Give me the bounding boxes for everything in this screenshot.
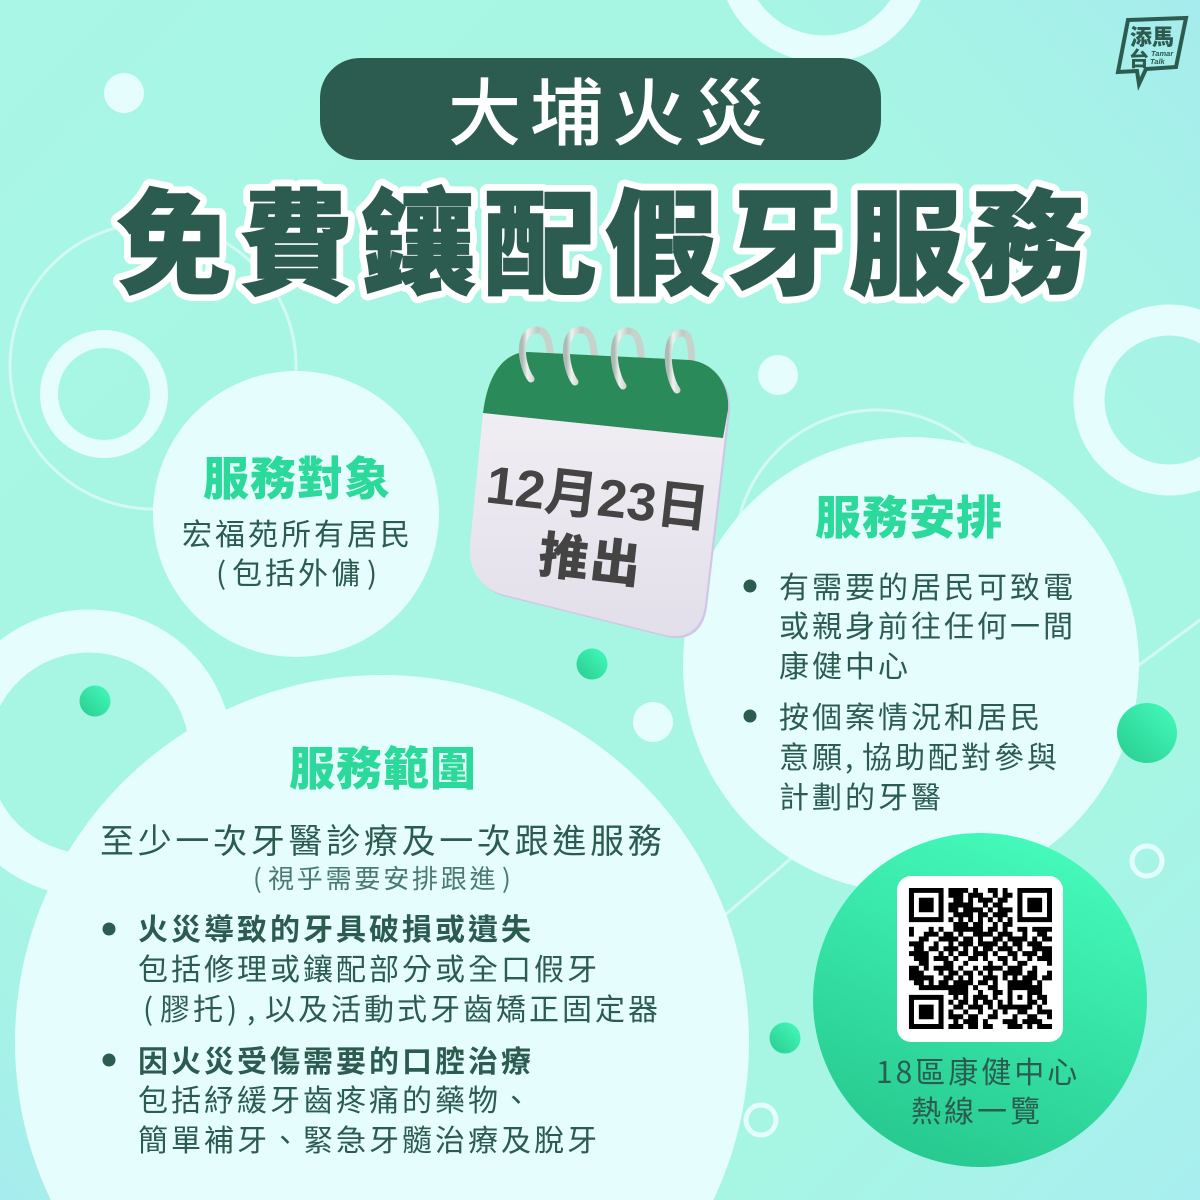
icon: calendar bbox=[470, 330, 730, 638]
text: service target description: 宏福苑所有居民 bbox=[182, 510, 413, 554]
bullet: damaged dentures bbox=[102, 905, 661, 1029]
text: scope summary: ) bbox=[502, 859, 514, 896]
main heading: 免費鑲配假牙服務 bbox=[117, 153, 1093, 318]
logo: Tamar Talk: Tamar bbox=[1151, 49, 1174, 58]
text: scope summary: 至少一次牙醫診療及一次跟進服務 bbox=[100, 814, 666, 863]
bullet: damaged dentures: 膠托 bbox=[160, 985, 226, 1029]
text: service target description bbox=[182, 510, 413, 593]
bullet list: service arrangement: 或親身前往任何一間 bbox=[779, 602, 1076, 646]
bullet: oral treatment bbox=[102, 1037, 600, 1160]
bullet: damaged dentures: 以及活動式牙齒矯正固定器 bbox=[265, 985, 661, 1029]
calendar date text bbox=[476, 456, 712, 605]
text: scope summary: 視乎需要安排跟進 bbox=[268, 859, 498, 896]
bullet: damaged dentures: ( bbox=[143, 985, 156, 1029]
logo: Tamar Talk: 添馬 bbox=[1130, 20, 1174, 52]
panel: service target bbox=[153, 371, 439, 657]
bullet: damaged dentures: 包括修理或鑲配部分或全口假牙 bbox=[138, 945, 600, 989]
bullet: oral treatment: 簡單補牙、緊急牙髓治療及脫牙 bbox=[138, 1116, 600, 1160]
text: scope summary: ( bbox=[253, 859, 265, 896]
main heading: 免費鑲配假牙服務 bbox=[117, 153, 1093, 318]
calendar date text: 12月23日 bbox=[483, 456, 712, 540]
bullet list: service arrangement: , bbox=[845, 733, 856, 777]
bullet list: service arrangement: 計劃的牙醫 bbox=[779, 773, 944, 817]
text: hotline caption bbox=[876, 1048, 1080, 1131]
bullet list: service arrangement: 協助配對參與 bbox=[862, 733, 1060, 777]
bullet list: service arrangement: 意願 bbox=[779, 733, 845, 777]
green dots bbox=[80, 648, 1177, 1054]
text: hotline caption: 熱線一覽 bbox=[911, 1087, 1043, 1131]
bullet list: service arrangement: 按個案情況和居民 bbox=[779, 693, 1043, 737]
bullet list: service arrangement: 康健中心 bbox=[779, 642, 911, 686]
logo: Tamar Talk: Talk bbox=[1150, 57, 1166, 66]
text: service target description: ( bbox=[216, 549, 229, 593]
panel: service arrangement bbox=[683, 437, 1139, 893]
logo: Tamar Talk: 台 bbox=[1129, 43, 1149, 72]
text: service target description: ) bbox=[367, 549, 380, 593]
calendar rings bbox=[522, 330, 682, 390]
calendar date text: 推出 bbox=[535, 515, 647, 598]
heading: service scope: 服務範圍 bbox=[289, 733, 477, 799]
bullet: damaged dentures: , bbox=[247, 985, 258, 1029]
bullet list: service arrangement bbox=[744, 563, 1076, 817]
text: hotline caption: 18區康健中心 bbox=[876, 1048, 1080, 1092]
bullet list: service arrangement: 有需要的居民可致電 bbox=[779, 563, 1076, 607]
title pill bbox=[320, 55, 881, 161]
QR code bbox=[897, 876, 1063, 1042]
title pill: 大埔火災 bbox=[448, 55, 776, 161]
panel: service scope bbox=[15, 675, 749, 1200]
panel: QR hotline bbox=[813, 833, 1147, 1167]
bullet: damaged dentures: 火災導致的牙具破損或遺失 bbox=[138, 905, 534, 949]
heading: service target: 服務對象 bbox=[203, 443, 391, 509]
heading: service arrangement: 服務安排 bbox=[815, 482, 1003, 548]
text: service target description: 包括外傭 bbox=[232, 549, 364, 593]
bullet: damaged dentures: ) bbox=[227, 985, 240, 1029]
logo: Tamar Talk bbox=[1118, 18, 1186, 84]
text: scope summary bbox=[100, 814, 666, 896]
bullet: oral treatment: 因火災受傷需要的口腔治療 bbox=[138, 1037, 534, 1081]
bullet: oral treatment: 包括紓緩牙齒疼痛的藥物、 bbox=[138, 1076, 534, 1120]
